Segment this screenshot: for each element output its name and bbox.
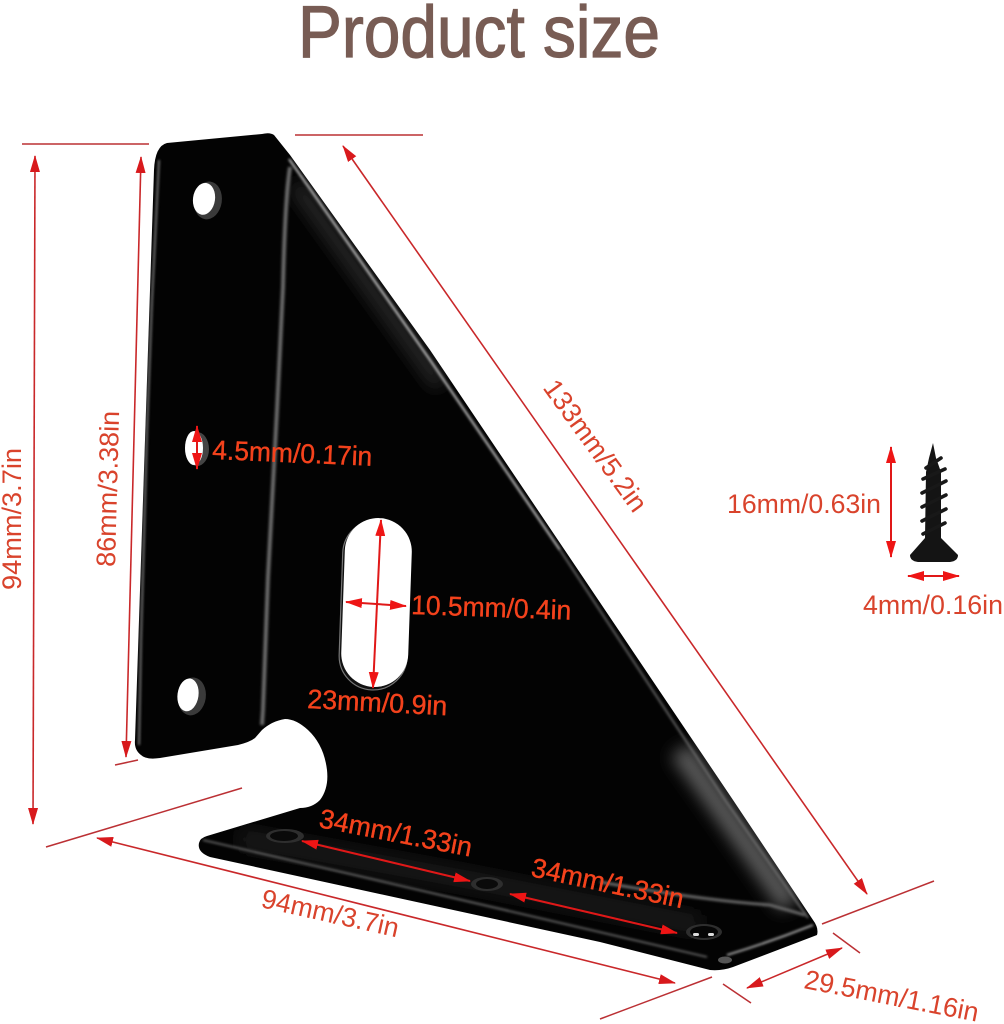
screw bbox=[910, 443, 958, 562]
bracket shading bbox=[139, 159, 813, 964]
base screw holes bbox=[266, 829, 722, 940]
dimension: 10.5mm slot width: 10.5mm/0.4in bbox=[411, 590, 572, 626]
dimension: screw width bbox=[863, 576, 1003, 620]
dimension: screw length: 16mm/0.63in bbox=[727, 489, 881, 519]
upright crease highlight bbox=[262, 167, 290, 725]
dimension: 94mm base: 94mm/3.7in bbox=[259, 884, 402, 943]
dimension: 86mm height bbox=[91, 157, 141, 765]
long slot bbox=[338, 517, 413, 691]
dimension: 34mm base left: 34mm/1.33in bbox=[317, 803, 475, 862]
dimension: 29.5mm base depth bbox=[723, 881, 981, 1024]
top hole bbox=[190, 180, 224, 221]
bracket bbox=[135, 133, 818, 970]
dimension: 86mm height: 86mm/3.38in bbox=[91, 410, 125, 567]
dimension: 133mm diagonal: 133mm/5.2in bbox=[537, 374, 653, 518]
dimension: 4.5mm hole: 4.5mm/0.17in bbox=[212, 435, 373, 472]
bracket silhouette bbox=[135, 133, 818, 970]
flange edge highlight bbox=[139, 160, 159, 745]
dimension: 23mm slot length: 23mm/0.9in bbox=[307, 684, 448, 721]
dimension: 34mm base left bbox=[302, 803, 475, 881]
diagonal edge highlight bbox=[289, 159, 560, 550]
dimension: 34mm base right: 34mm/1.33in bbox=[529, 853, 687, 914]
dimension: 94mm base bbox=[46, 788, 712, 1019]
middle hole bbox=[185, 431, 209, 466]
dimension: 23mm slot length bbox=[307, 520, 448, 721]
dimension: screw width: 4mm/0.16in bbox=[863, 590, 1003, 620]
bottom hole bbox=[175, 676, 208, 717]
dimension: 34mm base right bbox=[510, 853, 687, 933]
base plate edge highlights bbox=[203, 840, 707, 957]
